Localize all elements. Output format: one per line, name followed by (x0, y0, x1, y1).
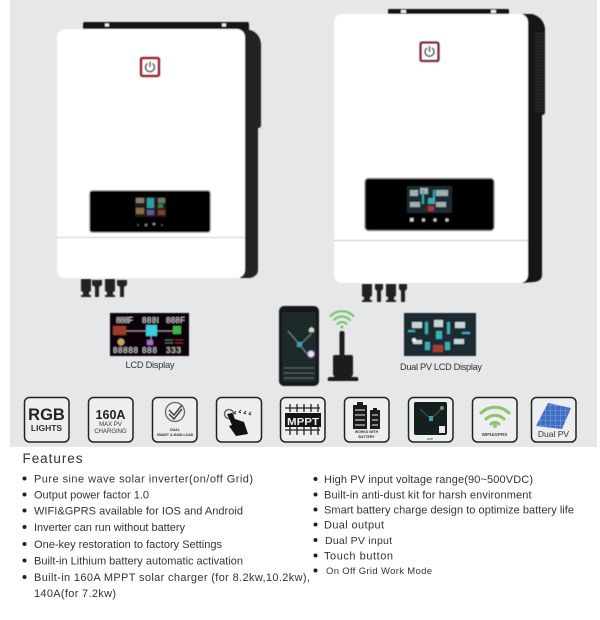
dual PV LCD display graphic (404, 313, 476, 356)
icon: dual smart check (152, 398, 197, 442)
features list: left column: 140A(for 7.2kw) (34, 588, 116, 600)
LCD display graphic: 888I (142, 316, 159, 325)
icon: wifi GPRS: WIFI&GPRS (482, 432, 507, 437)
icon: batteries (344, 398, 389, 442)
features list: left column: Output power factor 1.0 (34, 490, 149, 502)
power logo (420, 42, 438, 61)
icon: RGB lights: LIGHTS (31, 423, 62, 433)
features list: right column: High PV input voltage range(90~500VDC) (324, 474, 533, 486)
LCD display graphic: 88888 (113, 346, 139, 355)
features list: right column: Built-in anti-dust kit for harsh environment (324, 490, 532, 502)
icon: RGB lights: RGB (28, 406, 65, 424)
icon: MPPT: MPPT (287, 417, 319, 428)
icon: 160A max PV charging: CHARGING (94, 429, 127, 435)
panel: gray product background (10, 0, 597, 447)
LCD display graphic (110, 313, 189, 356)
body seam (334, 240, 528, 241)
features list: left column: One-key restoration to factory Settings (34, 539, 222, 551)
icon: 160A max PV charging: MAX PV (99, 422, 122, 428)
display panel (365, 178, 494, 230)
icon: app screen: APP (427, 437, 433, 441)
white body (57, 29, 245, 278)
features list: left column: Pure sine wave solar inverter(on/off Grid) (34, 474, 253, 486)
dual PV LCD label: Dual PV LCD Display (400, 362, 482, 372)
icon: RGB lights (24, 398, 69, 442)
features list: right column: On Off Grid Work Mode (326, 566, 432, 577)
power logo (141, 58, 159, 76)
icon: dual smart check: DUAL (170, 428, 181, 432)
icon: 160A max PV charging: 160A (96, 408, 125, 422)
features list: left column: Built-in 160A MPPT solar charger (for 8.2kw,10.2kw), (34, 572, 310, 584)
features list: right column: Smart battery charge design to optimize battery life (324, 504, 574, 516)
side heatsink (240, 30, 261, 278)
icon: batteries: WORKS WITH (355, 430, 379, 434)
display panel (90, 190, 210, 232)
features list: left column: Built-in Lithium battery automatic activation (34, 556, 243, 568)
LCD display graphic: 888F (166, 316, 185, 325)
icon: touch hand (216, 398, 262, 442)
icon: app screen (408, 398, 453, 442)
features list: left column: Inverter can run without battery (34, 522, 186, 534)
features list: right column: Dual output (324, 520, 384, 532)
LCD display graphic: 333 (166, 346, 182, 355)
icon: dual smart check: SMART & MAIN LOAD (157, 433, 194, 437)
LCD display graphic: 888F (116, 316, 133, 325)
inverter: right unit (334, 9, 545, 302)
inverter: left unit (57, 22, 261, 297)
icon: 160A max PV charging (88, 398, 133, 442)
features list: right column: Touch button (324, 550, 393, 562)
features heading: Features (22, 451, 83, 466)
icon: wifi GPRS (472, 398, 517, 442)
LCD display graphic: 888 (142, 346, 158, 355)
phone with app (279, 306, 319, 386)
wifi symbol (330, 311, 354, 328)
mounting bracket (83, 22, 249, 32)
mounting bracket (388, 9, 509, 16)
icon: dual PV solar panel: Dual PV (538, 429, 569, 439)
icon: MPPT (280, 398, 325, 442)
side heatsink (522, 14, 545, 283)
icon: batteries: BATTERY (358, 435, 375, 439)
features list: left column: WIFI&GPRS available for IOS and Android (34, 506, 243, 518)
white body (334, 14, 528, 283)
features list: right column (314, 474, 574, 577)
wifi dongle (328, 331, 358, 381)
icon: dual PV solar panel (532, 398, 576, 442)
cable connectors (81, 279, 127, 297)
cable connectors (362, 284, 407, 302)
features list: right column: Dual PV input (325, 535, 392, 547)
features list: left column (22, 474, 310, 600)
body seam (57, 237, 245, 238)
LCD display label: LCD Display (126, 360, 175, 370)
